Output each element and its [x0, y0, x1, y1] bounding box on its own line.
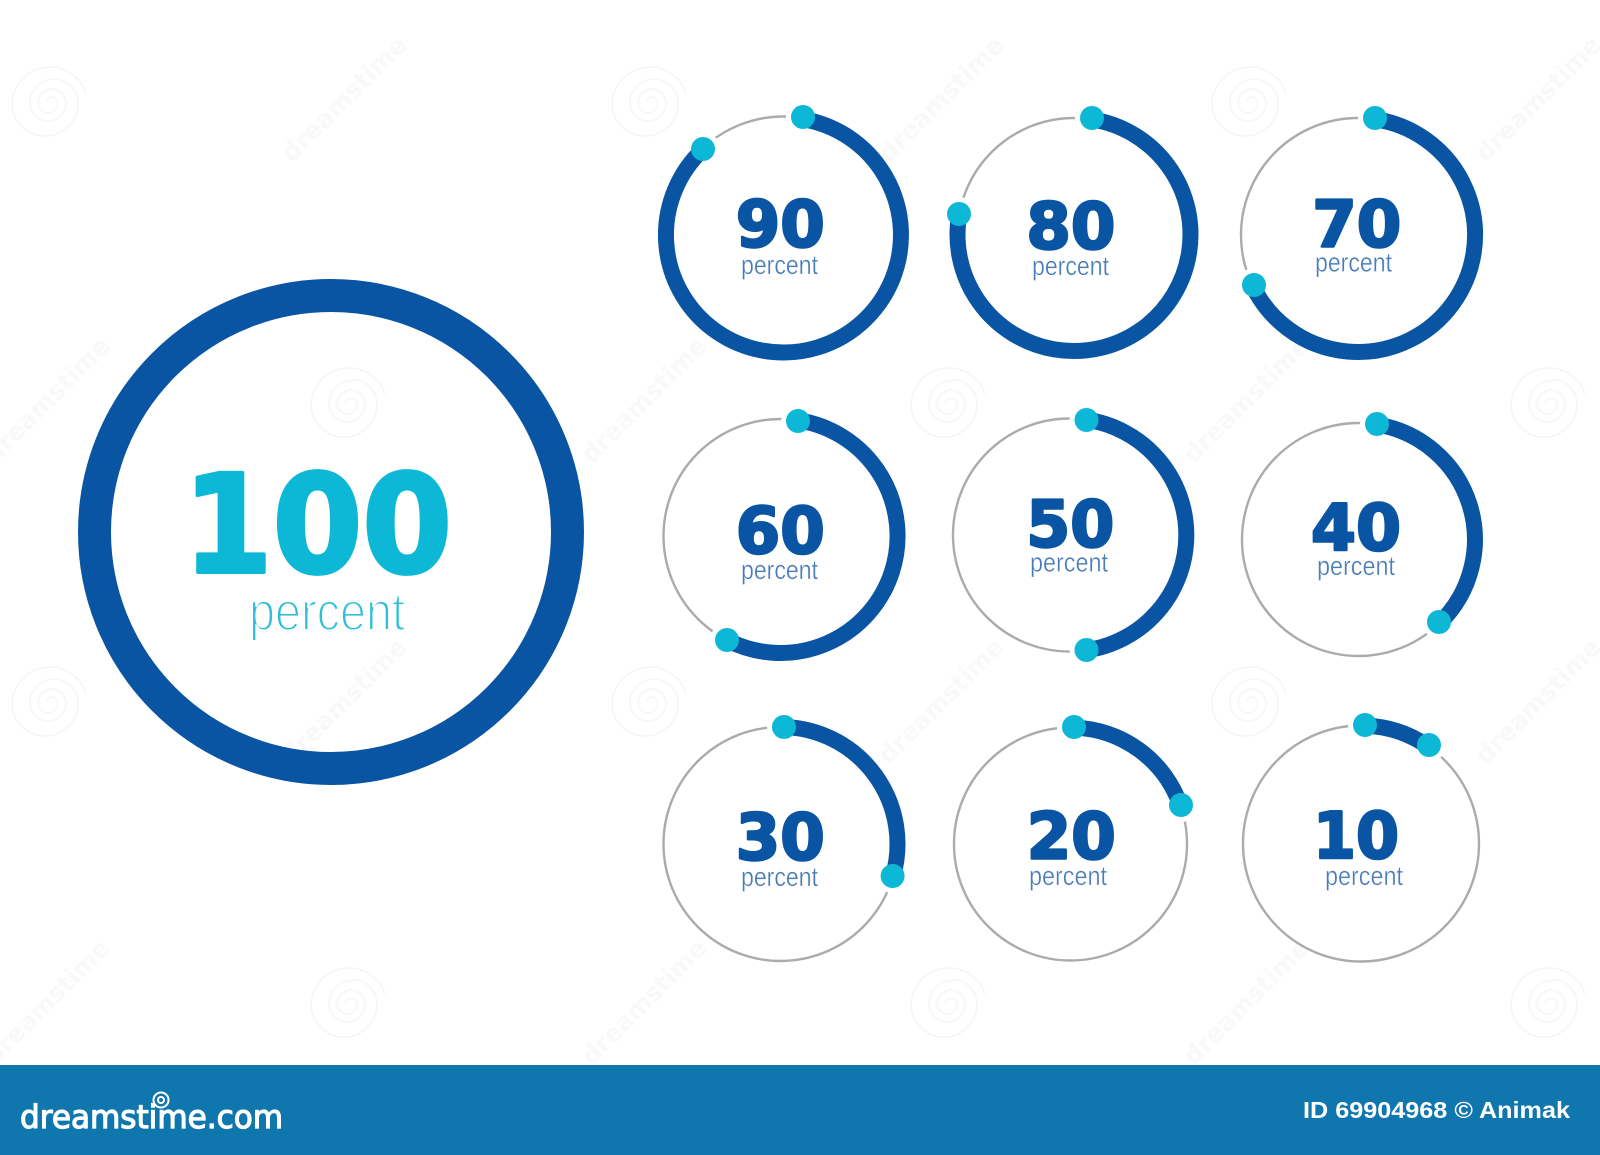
background watermark pattern: dreamstime — [872, 632, 1010, 770]
number: 60: 60 — [736, 495, 825, 569]
arc: 60 percent — [727, 420, 898, 653]
label: percent: percent — [741, 555, 818, 585]
number: 50: 50 — [1026, 488, 1114, 562]
label: percent: percent — [1325, 861, 1403, 891]
arc: 20 percent — [1074, 728, 1180, 805]
arc: 10 percent — [1365, 726, 1428, 746]
background watermark pattern: dreamstime — [575, 331, 713, 469]
background watermark pattern: dreamstime — [275, 632, 413, 770]
number: 40: 40 — [1311, 492, 1401, 566]
arc: 90 percent — [666, 119, 901, 353]
panel: 20 percent ring — [954, 710, 1198, 960]
panel: 100 percent ring — [94, 296, 568, 768]
footer logo: dreamstime.com: dreamstime.com — [20, 1098, 283, 1136]
arc: 70 percent — [1253, 119, 1475, 352]
panel: 30 percent ring — [664, 710, 910, 961]
footer bar — [0, 1065, 1600, 1155]
label: percent: percent — [249, 582, 405, 642]
panel: 80 percent ring — [942, 101, 1190, 351]
label: percent: percent — [741, 862, 818, 892]
number: 100: 100 — [183, 447, 452, 605]
panel: 50 percent ring — [953, 403, 1186, 667]
arc: 80 percent — [957, 119, 1190, 351]
panel: 10 percent ring — [1243, 708, 1479, 962]
number: 30: 30 — [736, 802, 825, 876]
background watermark pattern: dreamstime — [575, 933, 713, 1071]
panel: 90 percent ring — [665, 100, 902, 354]
ring: full 100 percent — [94, 296, 568, 768]
background watermark pattern: dreamstime — [275, 30, 413, 168]
panel: 70 percent ring — [1237, 101, 1475, 352]
label: percent: percent — [741, 250, 818, 280]
icon: logo spiral — [154, 1092, 168, 1108]
number: 70: 70 — [1312, 188, 1401, 262]
number: 80: 80 — [1026, 190, 1115, 264]
number: 90: 90 — [736, 188, 825, 262]
number: 10: 10 — [1313, 800, 1399, 874]
background watermark pattern: dreamstime — [872, 30, 1010, 168]
label: percent: percent — [1029, 861, 1107, 891]
arc: 50 percent — [1086, 420, 1186, 650]
number: 20: 20 — [1027, 800, 1116, 874]
arc: 40 percent — [1377, 424, 1475, 623]
label: percent: percent — [1317, 551, 1395, 581]
arc: 30 percent — [784, 727, 898, 876]
panel: 40 percent ring — [1242, 407, 1475, 656]
panel: 60 percent ring — [664, 404, 898, 657]
background watermark pattern: dreamstime — [1177, 933, 1315, 1071]
label: percent: percent — [1315, 248, 1392, 278]
label: percent: percent — [1032, 251, 1109, 281]
label: percent: percent — [1030, 548, 1108, 578]
background watermark pattern: dreamstime — [1177, 331, 1315, 469]
footer credit: ID 69904968 © Animak — [1303, 1097, 1571, 1123]
